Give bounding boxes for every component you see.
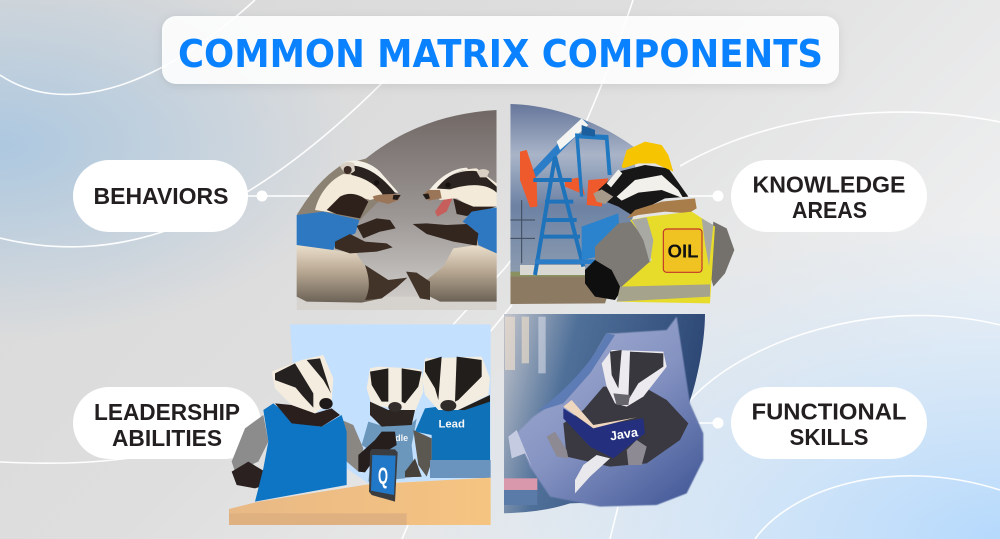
middle badger: dle (395, 433, 408, 443)
reading badger: Java (609, 425, 640, 443)
label: leadership abilities: LEADERSHIP (94, 399, 240, 425)
panel: functional skills illustration (504, 314, 707, 514)
phone: Q (378, 462, 388, 488)
right badger: Lead (438, 418, 465, 430)
hammock (508, 317, 703, 507)
panel: leadership abilities illustration (229, 324, 491, 525)
photo backdrop (297, 110, 497, 310)
panel: behaviors illustration (297, 110, 497, 310)
left badger (297, 158, 407, 303)
label: leadership abilities: ABILITIES (112, 425, 222, 451)
blue backdrop (290, 324, 491, 483)
oil field backdrop (510, 104, 644, 305)
label: knowledge areas (731, 160, 927, 232)
right badger (405, 357, 491, 478)
label: knowledge areas: AREAS (792, 197, 867, 223)
reading badger (547, 350, 688, 493)
label: behaviors (73, 160, 248, 232)
room backdrop (504, 314, 707, 514)
hard hat badger (585, 142, 734, 303)
hard hat badger: OIL (667, 241, 699, 262)
title banner: COMMON MATRIX COMPONENTS (178, 32, 823, 77)
panel: knowledge areas illustration (510, 104, 734, 305)
front badger (232, 355, 397, 502)
table (229, 478, 491, 525)
middle badger (362, 367, 423, 482)
pump jack (510, 118, 620, 275)
label: functional skills: FUNCTIONAL (752, 398, 906, 424)
phone (369, 449, 398, 502)
label: functional skills: SKILLS (790, 424, 868, 450)
label: leadership abilities (73, 387, 261, 459)
label: knowledge areas: KNOWLEDGE (752, 172, 906, 198)
connector: knowledge areas (688, 191, 723, 201)
connector: behaviors (245, 191, 312, 201)
right badger (406, 168, 497, 302)
connector: functional skills (695, 418, 723, 428)
title banner (162, 16, 839, 84)
label: behaviors: BEHAVIORS (94, 183, 228, 209)
label: functional skills (731, 387, 927, 459)
